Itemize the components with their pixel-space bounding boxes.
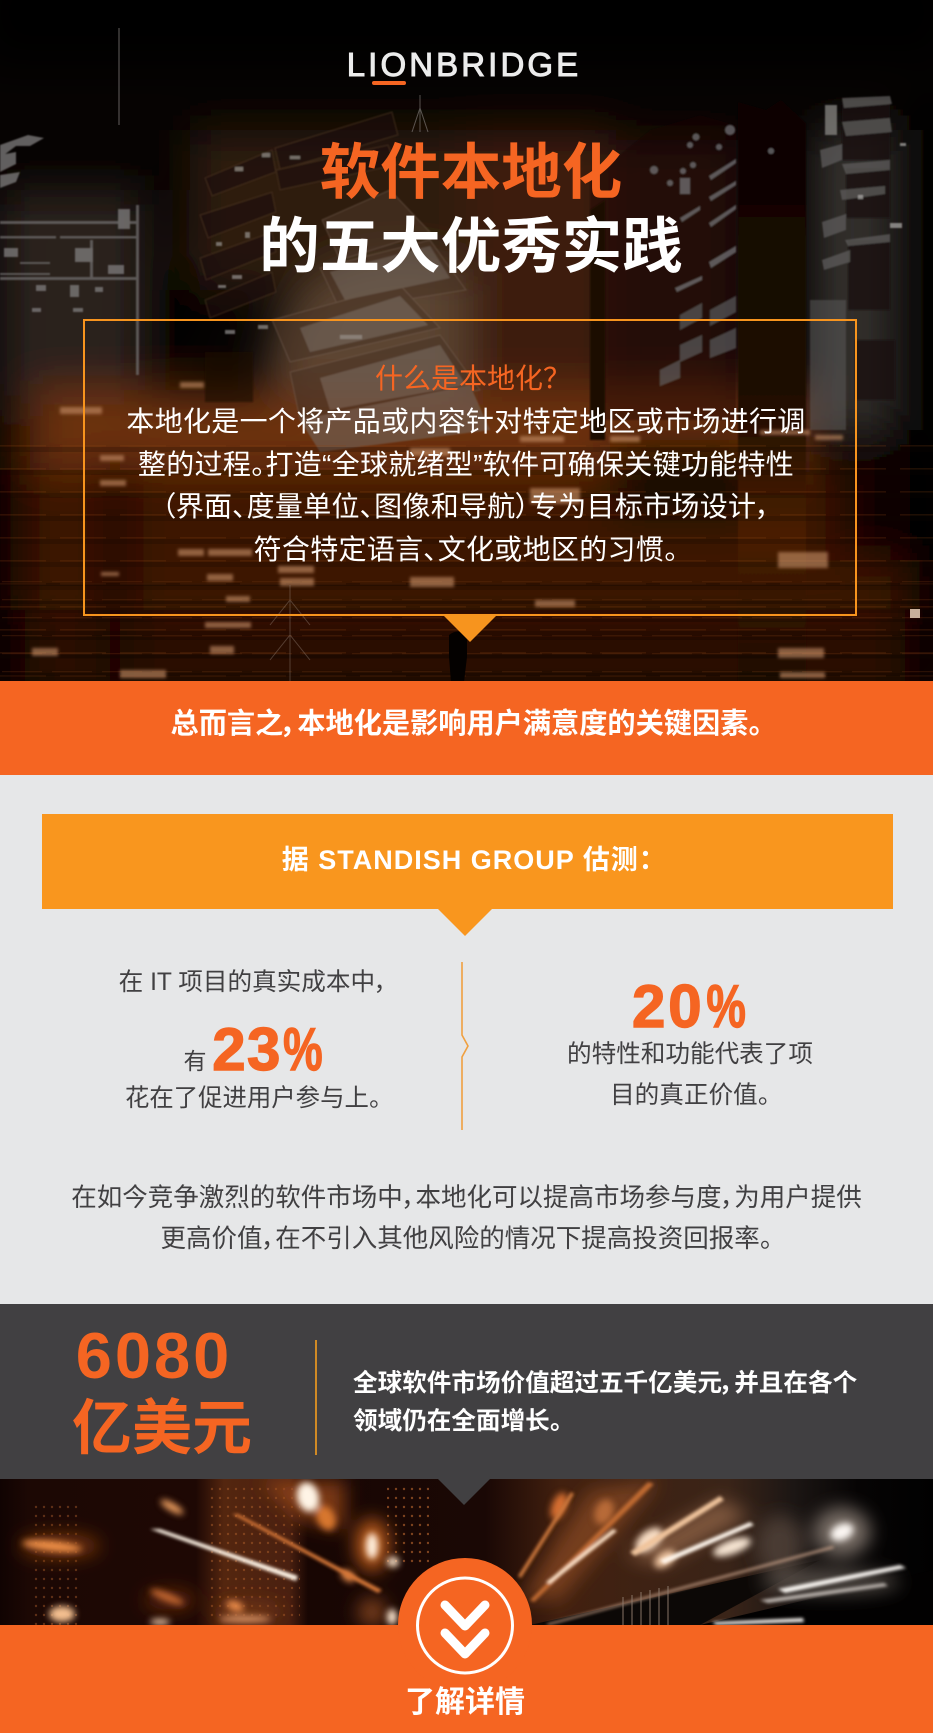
stat number — [212, 1016, 324, 1083]
stat lead text: 在 IT 项目的真实成本中， — [119, 969, 387, 996]
paragraph: 在如今竞争激烈的软件市场中，本地化可以提高市场参与度，为用户提供 — [71, 1184, 862, 1212]
lower city lines — [0, 440, 933, 682]
arrow: dark panel pointer — [438, 1479, 490, 1505]
panel: Standish Group stats — [0, 775, 933, 1304]
mast — [119, 28, 428, 132]
icon: double chevron button — [398, 1558, 532, 1674]
paragraph — [71, 1184, 862, 1253]
panel: hero — [0, 0, 933, 682]
unit: 亿美元 — [72, 1395, 252, 1462]
divider with notch — [461, 962, 469, 1130]
radio tower — [270, 585, 310, 682]
panel: what is localization — [83, 319, 857, 616]
person silhouette — [449, 632, 467, 682]
panel: light streak image — [0, 1479, 933, 1626]
subheading: 什么是本地化？ — [375, 363, 557, 394]
left block — [0, 135, 139, 375]
divider line — [315, 1340, 316, 1455]
body text: 本地化是一个将产品或内容针对特定地区或市场进行调 — [126, 406, 806, 437]
call to action label: 了解详情 — [405, 1686, 525, 1719]
panel: market value — [0, 1304, 933, 1479]
market text — [353, 1370, 857, 1435]
right towers — [590, 96, 906, 682]
title line 1: 软件本地化 — [320, 138, 622, 206]
large soft tones — [0, 0, 933, 700]
logo: Lionbridge — [347, 46, 581, 85]
streak background — [0, 1479, 933, 1659]
logo underline — [372, 81, 406, 85]
hero background: night city — [0, 28, 933, 681]
heading box — [42, 814, 893, 909]
stat text — [567, 1041, 813, 1109]
stat: 20% — [567, 973, 813, 1109]
banner text: 总而言之，本地化是影响用户满意度的关键因素。 — [171, 707, 762, 739]
market text: 全球软件市场价值超过五千亿美元，并且在各个 — [353, 1370, 857, 1397]
stat connector word: 有 — [184, 1048, 206, 1074]
arrow: heading pointer — [438, 909, 492, 936]
body text — [126, 406, 806, 565]
market text: 领域仍在全面增长。 — [353, 1408, 562, 1435]
market value figure — [72, 1319, 252, 1462]
stat text: 的特性和功能代表了项 — [567, 1041, 813, 1068]
body text: 符合特定语言、文化或地区的习惯。 — [254, 534, 678, 565]
heading text: 据 STANDISH GROUP 估测： — [282, 845, 653, 875]
stat number — [632, 973, 748, 1040]
stat number: % — [283, 1016, 324, 1083]
stat trailing text: 花在了促进用户参与上。 — [125, 1085, 381, 1112]
panel: call to action — [0, 1625, 933, 1733]
centre slabs — [200, 112, 490, 452]
banner: summary — [0, 681, 933, 775]
title line 2: 的五大优秀实践 — [259, 212, 683, 280]
number: 6080 — [76, 1319, 232, 1392]
body text: （界面、度量单位、图像和导航）专为目标市场设计， — [161, 491, 771, 522]
paragraph: 更高价值，在不引入其他风险的情况下提高投资回报率。 — [160, 1225, 772, 1253]
stat number: 20 — [632, 973, 705, 1040]
stat: 23% — [119, 969, 387, 1112]
stat number: % — [706, 973, 748, 1040]
title — [259, 138, 683, 280]
body text: 整的过程。打造“全球就绪型”软件可确保关键功能特性 — [138, 449, 794, 480]
arrow: hero box pointer — [444, 616, 496, 642]
logo wordmark: LIONBRIDGE — [347, 46, 581, 83]
lit windows — [32, 382, 843, 678]
stat number: 23 — [212, 1016, 282, 1083]
stat text: 目的真正价值。 — [610, 1082, 770, 1109]
